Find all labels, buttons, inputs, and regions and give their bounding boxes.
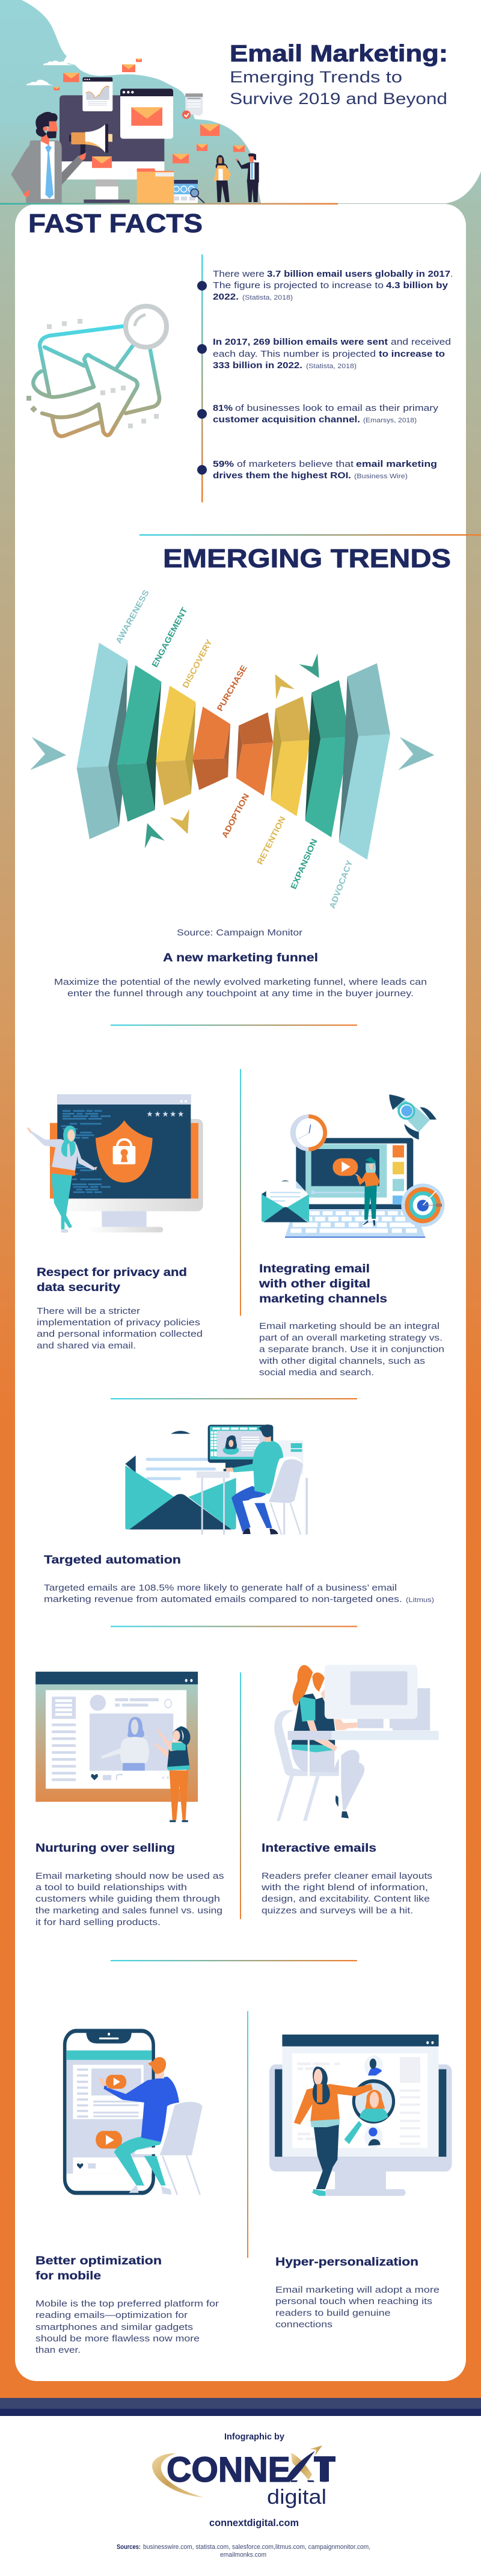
- section: better optimization: [35, 2255, 219, 2355]
- section: interactive emails: with the right blend of information,: [261, 1883, 428, 1893]
- funnel stage: expansion: [305, 680, 350, 837]
- icon: email and paper plane: [26, 306, 167, 436]
- megaphone: [69, 124, 112, 155]
- header white blob: [22, 0, 481, 203]
- title: Email Marketing:: [230, 41, 448, 67]
- funnel labels: AWARENESS: [114, 588, 151, 645]
- section: nurturing over selling: the marketing and sales funnel vs. using: [35, 1906, 222, 1915]
- section: integrating email: [259, 1263, 444, 1378]
- fact 1: 4.3 billion by: [386, 281, 448, 291]
- sources: emailmonks.com: [220, 2551, 266, 2559]
- funnel stage: retention: [271, 697, 310, 816]
- illustration: mobile phone: [65, 2031, 203, 2195]
- logo: connext digital: [152, 2445, 335, 2509]
- funnel labels: ADOPTION: [220, 792, 251, 839]
- funnel heading: A new marketing funnel: [163, 952, 318, 964]
- fact 4: of marketers believe that: [237, 460, 354, 469]
- section: nurturing over selling: customers while guiding them through: [35, 1894, 220, 1904]
- man with megaphone: [11, 112, 86, 203]
- section: respect for privacy: data security: [37, 1281, 120, 1294]
- logo: connext digital: CONNEXT: [167, 2450, 335, 2489]
- illustration: targeted automation: [125, 1425, 308, 1535]
- fact 1: 2022.: [213, 292, 239, 302]
- section: targeted automation: Targeted emails are 108.5% more likely to generate half of a business’ email: [44, 1583, 397, 1593]
- fact 3: (Emarsys, 2018): [363, 417, 417, 424]
- section: integrating email: with other digital: [259, 1278, 370, 1290]
- section: respect for privacy: and shared via email.: [37, 1342, 136, 1351]
- title: Survive 2019 and Beyond: [230, 90, 447, 108]
- funnel stage: adoption: [236, 712, 273, 795]
- section: hyper-personalization: connections: [275, 2320, 332, 2329]
- illustration: nurturing social post: [35, 1672, 198, 1822]
- section: interactive emails: Readers prefer cleaner email layouts: [262, 1872, 432, 1881]
- fact 3: customer acquisition channel.: [213, 415, 360, 425]
- title: Emerging Trends to: [230, 68, 402, 86]
- funnel body text: Maximize the potential of the newly evolved marketing funnel, where leads can: [54, 978, 427, 987]
- ground line: [0, 203, 338, 205]
- monitor: [60, 95, 164, 203]
- envelope at monitor: [92, 156, 112, 168]
- section: hyper-personalization: readers to build genuine: [275, 2309, 391, 2319]
- illustration: privacy monitor: [26, 1094, 203, 1233]
- logo: connext digital: digital: [267, 2486, 326, 2509]
- section: integrating email: Email marketing should be an integral: [259, 1322, 440, 1331]
- section: integrating email: with other digital channels, such as: [259, 1357, 425, 1366]
- fact 3: [213, 404, 439, 425]
- section: integrating email: marketing channels: [259, 1293, 387, 1305]
- section: respect for privacy: [37, 1266, 203, 1351]
- funnel labels: RETENTION: [256, 815, 287, 866]
- presenter woman: [354, 1157, 380, 1225]
- keyboard: [285, 1210, 425, 1237]
- desk: [197, 1471, 308, 1535]
- fact 2: In 2017, 269 billion emails were sent: [213, 337, 388, 347]
- fact 4: drives them the highest ROI.: [213, 471, 351, 481]
- illustration: integrated channels: [262, 1094, 444, 1237]
- fact 4: (Business Wire): [354, 473, 408, 480]
- fact 3: 81%: [213, 404, 233, 413]
- fact 4: 59%: [213, 460, 234, 469]
- fact 4: [213, 460, 437, 481]
- seated woman: [292, 1665, 364, 1818]
- funnel body text: [54, 978, 427, 999]
- section: integrating email: a separate branch. Use it in conjunction: [259, 1345, 444, 1355]
- fact 2: each day. This number is projected: [213, 350, 376, 359]
- section: hyper-personalization: Email marketing will adopt a more: [275, 2285, 440, 2295]
- funnel labels: [114, 588, 354, 910]
- rocket: [389, 1094, 437, 1139]
- chair: [274, 1710, 340, 1821]
- woman: [294, 2066, 373, 2196]
- funnel labels: PURCHASE: [215, 664, 249, 713]
- funnel labels: ADVOCACY: [328, 859, 354, 910]
- seated man: [98, 2057, 203, 2195]
- funnel stage: advocacy: [339, 664, 390, 860]
- fact 2: [213, 337, 451, 371]
- hero illustration: [11, 58, 259, 203]
- section: better optimization: should be more flawless now more: [35, 2334, 200, 2344]
- seated man with chair: [224, 1425, 303, 1535]
- section: respect for privacy: Respect for privacy and: [37, 1266, 187, 1279]
- section: better optimization: smartphones and similar gadgets: [35, 2323, 193, 2332]
- section: better optimization: reading emails—optimization for: [35, 2311, 188, 2320]
- magnifier: [344, 2081, 394, 2144]
- floating envelopes: [54, 58, 245, 164]
- section: nurturing over selling: Nurturing over selling: [35, 1842, 175, 1855]
- chart card: [82, 77, 112, 111]
- section: integrating email: Integrating email: [259, 1263, 370, 1275]
- standing woman: [153, 1726, 191, 1822]
- title: [230, 41, 448, 108]
- funnel stage: awareness: [77, 642, 127, 839]
- footer credit: Infographic by: [224, 2432, 285, 2442]
- section: respect for privacy: There will be a stricter: [37, 1307, 140, 1316]
- funnel source: Source: Campaign Monitor: [177, 928, 302, 938]
- document with check: [182, 93, 203, 119]
- section: hyper-personalization: Hyper-personalization: [275, 2256, 418, 2269]
- fact 2: (Statista, 2018): [306, 363, 357, 370]
- desktop computer: [288, 1665, 439, 1820]
- fact 1: There were: [213, 270, 265, 279]
- section: nurturing over selling: [35, 1842, 224, 1927]
- woman standing: [213, 155, 231, 202]
- footer bands: [0, 2398, 481, 2416]
- fact 1: [213, 270, 453, 302]
- section: interactive emails: design, and excitability. Content like: [262, 1894, 430, 1904]
- fact 3: of businesses look to email as their primary: [235, 404, 439, 413]
- sources: businesswire.com, statista.com, salesforce.com,litmus.com, campaignmonitor.com,: [143, 2544, 370, 2551]
- section: respect for privacy: implementation of privacy policies: [37, 1318, 200, 1328]
- section: targeted automation: Targeted automation: [44, 1554, 181, 1567]
- big envelope: [125, 1431, 236, 1529]
- section: nurturing over selling: Email marketing should now be used as: [35, 1872, 224, 1881]
- section: interactive emails: [261, 1842, 432, 1915]
- clock: [290, 1114, 327, 1151]
- section: targeted automation: marketing revenue from automated emails compared to non-targeted ones.: [44, 1595, 402, 1604]
- white content panel: [15, 204, 466, 2381]
- illustration: interactive emails: [274, 1665, 439, 1821]
- woman in post: [101, 1717, 149, 1770]
- section: respect for privacy: and personal information collected: [37, 1330, 203, 1339]
- section: nurturing over selling: a tool to build relationships with: [35, 1883, 187, 1893]
- section: interactive emails: quizzes and surveys will be a hit.: [262, 1906, 413, 1915]
- presenter woman: [26, 1126, 97, 1233]
- section: hyper-personalization: [275, 2256, 440, 2329]
- fact 1: 3.7 billion email users globally in 2017: [267, 270, 450, 279]
- section: hyper-personalization: personal touch when reaching its: [275, 2297, 432, 2306]
- shield with padlock: [96, 1120, 153, 1183]
- computer: [208, 1425, 303, 1474]
- heading: emerging trends: EMERGING TRENDS: [163, 544, 451, 573]
- section: integrating email: social media and search.: [259, 1368, 374, 1378]
- laptop: [296, 1138, 413, 1209]
- email window card: [120, 88, 173, 139]
- fact 2: to increase to: [379, 350, 445, 359]
- man standing: [236, 153, 259, 202]
- section: targeted automation: (Litmus): [406, 1597, 434, 1604]
- open envelope: [262, 1180, 309, 1222]
- funnel body text: enter the funnel through any touchpoint at any time in the buyer journey.: [67, 989, 414, 999]
- fact 2: and received: [391, 337, 451, 347]
- folder and small window: [137, 168, 204, 203]
- funnel labels: ENGAGEMENT: [150, 606, 189, 669]
- funnel arrows: [30, 653, 434, 848]
- section: better optimization: than ever.: [35, 2346, 81, 2355]
- timeline: [197, 254, 207, 502]
- section: targeted automation: [44, 1554, 434, 1604]
- funnel stage: discovery: [156, 686, 196, 806]
- section: interactive emails: Interactive emails: [262, 1842, 376, 1855]
- heading: fast facts: FAST FACTS: [28, 209, 203, 238]
- clouds: [26, 61, 74, 85]
- target: [401, 1183, 444, 1227]
- sources: Sources:: [117, 2544, 141, 2551]
- funnel labels: DISCOVERY: [181, 638, 214, 689]
- section: better optimization: for mobile: [35, 2270, 101, 2282]
- fact 4: email marketing: [356, 460, 437, 469]
- section: better optimization: Mobile is the top preferred platform for: [35, 2299, 219, 2309]
- section: better optimization: Better optimization: [35, 2255, 162, 2267]
- section: nurturing over selling: it for hard selling products.: [35, 1918, 161, 1927]
- sources: [117, 2544, 370, 2559]
- website url: connextdigital.com: [209, 2517, 299, 2528]
- fact 1: The figure is projected to increase to: [213, 281, 384, 291]
- fact 2: 333 billion in 2022.: [213, 361, 302, 371]
- funnel stage: purchase: [192, 706, 230, 790]
- fact 1: (Statista, 2018): [242, 294, 293, 301]
- funnel stage: engagement: [117, 665, 161, 822]
- section: integrating email: part of an overall marketing strategy vs.: [259, 1333, 443, 1343]
- funnel diagram: [30, 588, 434, 910]
- fact 1: .: [450, 270, 453, 279]
- illustration: hyper-personalization: [269, 2035, 452, 2196]
- funnel labels: EXPANSION: [289, 837, 319, 890]
